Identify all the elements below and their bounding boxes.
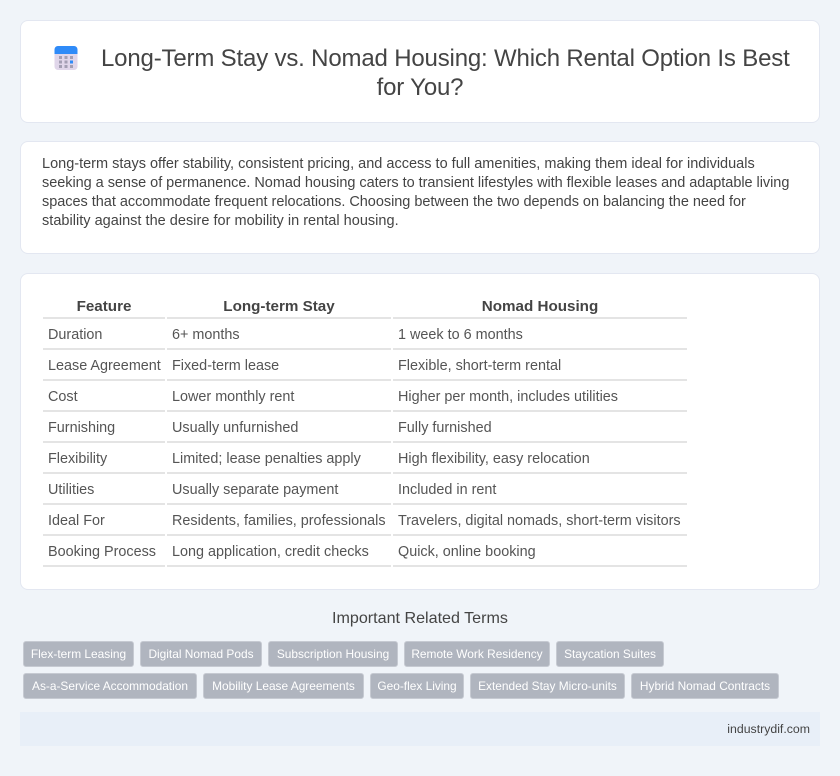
related term tags: Extended Stay Micro-units: [478, 679, 617, 693]
comparison table: Quick, online booking: [398, 544, 536, 560]
title: Long-Term Stay vs. Nomad Housing: Which Rental Option Is Best: [101, 45, 790, 72]
comparison table: Usually separate payment: [172, 482, 338, 498]
table panel: [20, 273, 820, 590]
intro text: spaces that accommodate frequent relocations. Choosing between the two depends on balancing the need for: [42, 194, 746, 210]
comparison table: [43, 298, 687, 567]
comparison table: Lease Agreement: [48, 358, 161, 374]
intro text: [42, 156, 789, 229]
footer bar: [20, 712, 820, 746]
title: for You?: [377, 74, 463, 101]
related term tags: Digital Nomad Pods: [148, 647, 254, 661]
related term tags: Subscription Housing: [277, 647, 389, 661]
related term tags: Remote Work Residency: [411, 647, 543, 661]
related term tags: Mobility Lease Agreements: [212, 679, 355, 693]
comparison table: Furnishing: [48, 420, 115, 436]
related terms heading: Important Related Terms: [332, 609, 508, 627]
comparison table: Flexible, short-term rental: [398, 358, 561, 374]
comparison table: 1 week to 6 months: [398, 327, 523, 343]
intro panel: [20, 141, 820, 254]
comparison table: Fully furnished: [398, 420, 492, 436]
related term tags: Hybrid Nomad Contracts: [640, 679, 770, 693]
related term tags: Staycation Suites: [564, 647, 656, 661]
comparison table: Duration: [48, 327, 102, 343]
icon: calendar: [54, 46, 78, 70]
comparison table: Flexibility: [48, 451, 107, 467]
comparison table: Long-term Stay: [223, 298, 335, 315]
intro text: stability against the desire for mobility in rental housing.: [42, 213, 399, 229]
comparison table: Long application, credit checks: [172, 544, 369, 560]
comparison table: Fixed-term lease: [172, 358, 279, 374]
comparison table: Higher per month, includes utilities: [398, 389, 618, 405]
comparison table: Utilities: [48, 482, 94, 498]
related term tags: Flex-term Leasing: [31, 647, 126, 661]
related term tags: Geo-flex Living: [377, 679, 457, 693]
comparison table: High flexibility, easy relocation: [398, 451, 590, 467]
related term tags: [23, 641, 779, 699]
comparison table: Lower monthly rent: [172, 389, 294, 405]
intro text: seeking a sense of permanence. Nomad housing caters to transient lifestyles with flexible leases and adaptable living: [42, 175, 789, 191]
related term tags: As-a-Service Accommodation: [32, 679, 188, 693]
comparison table: Residents, families, professionals: [172, 513, 386, 529]
comparison table: Ideal For: [48, 513, 105, 529]
comparison table: Booking Process: [48, 544, 156, 560]
comparison table: Usually unfurnished: [172, 420, 298, 436]
header panel: [20, 20, 820, 123]
intro text: Long-term stays offer stability, consistent pricing, and access to full amenities, making them ideal for individuals: [42, 156, 755, 172]
title: [101, 45, 790, 101]
comparison table: Limited; lease penalties apply: [172, 451, 361, 467]
comparison table: 6+ months: [172, 327, 240, 343]
comparison table: Feature: [77, 298, 131, 315]
comparison table: Cost: [48, 389, 78, 405]
comparison table: Travelers, digital nomads, short-term visitors: [398, 513, 681, 529]
comparison table: Nomad Housing: [482, 298, 598, 315]
footer source text: industrydif.com: [727, 722, 810, 736]
comparison table: Included in rent: [398, 482, 496, 498]
